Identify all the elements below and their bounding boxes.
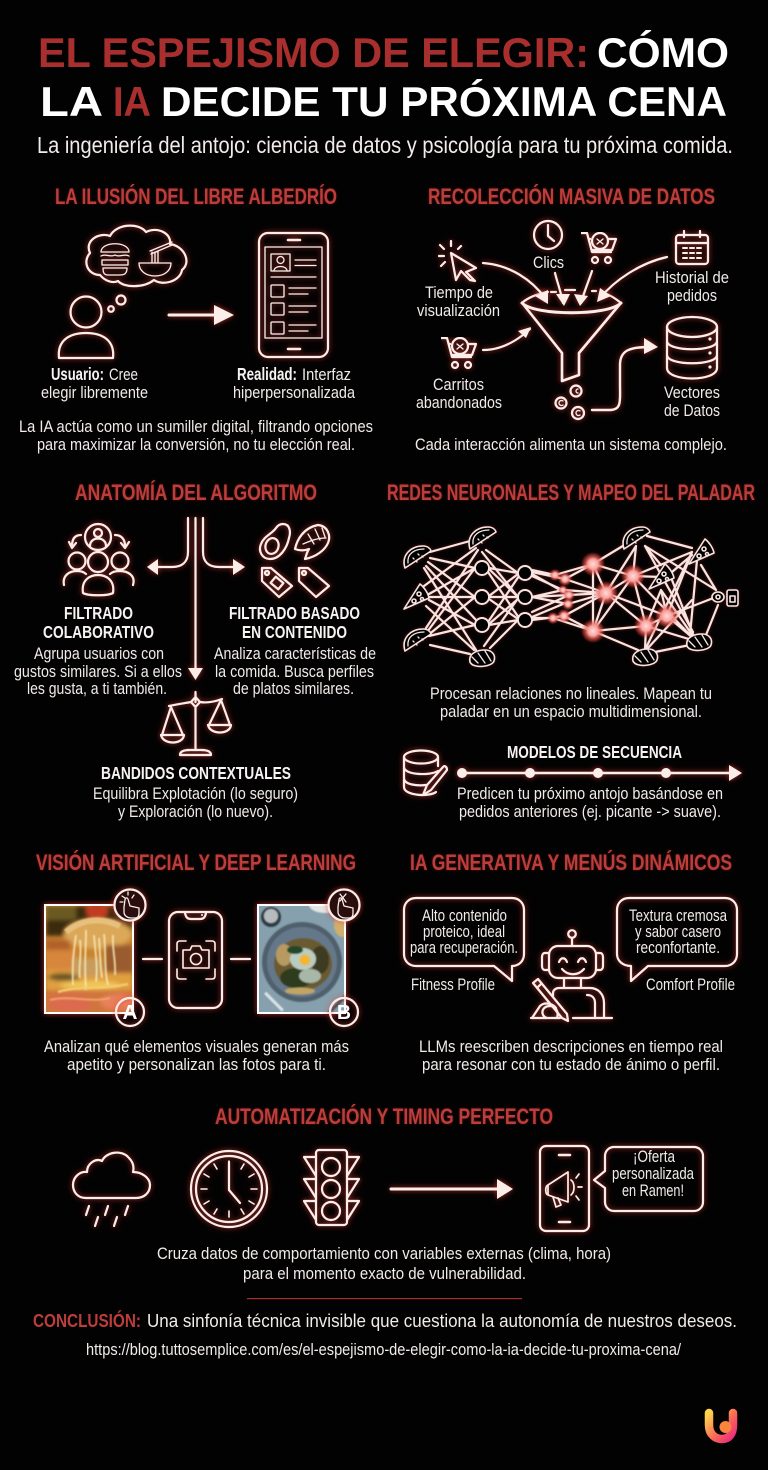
icon: robot writing [531,930,612,1021]
label: filtrado basado en contenido: EN CONTENIDO [242,622,347,642]
panel: visión artificial [36,850,360,1074]
label: realidad [233,364,356,402]
title [38,28,729,125]
data source labels: Clics [533,254,564,272]
heading: ANATOMÍA DEL ALGORITMO [75,480,317,505]
arrows into funnel [483,257,667,350]
conclusion: Una sinfonía técnica invisible que cuestiona la autonomía de nuestros deseos. [147,1311,737,1331]
label: filtrado colaborativo: FILTRADO [64,603,133,623]
badge: B [330,998,358,1026]
label: filtrado colaborativo: COLABORATIVO [43,622,154,642]
description [419,1038,723,1074]
icon: phone with megaphone [540,1146,589,1231]
description [157,1245,611,1283]
badge: touch A [114,890,146,920]
label: realidad: Realidad: [237,364,297,384]
title: IA [113,78,151,125]
description: para maximizar la conversión, no tu elección real. [37,436,355,454]
description [19,418,373,454]
speech bubble: comfort: y sabor casero [635,923,721,941]
icon: funnel [522,290,621,419]
neurons [475,561,532,632]
icon: database with pencil [404,750,447,795]
icon: user thinking of food [59,226,186,358]
icon: collaborative users [64,524,134,595]
label: filtrado basado en contenido: Analiza características de [214,645,376,663]
data source labels: visualización [417,302,500,320]
label: filtrado colaborativo [14,603,182,698]
panel: anatomía del algoritmo [14,480,376,821]
description: Predicen tu próximo antojo basándose en [457,785,723,803]
description: apetito y personalizan las fotos para ti. [67,1056,326,1074]
icon: phone with camera [169,912,222,1008]
label: fitness profile: Fitness Profile [411,976,495,994]
description: para resonar con tu estado de ánimo o perfil. [422,1056,720,1074]
description: pedidos anteriores (ej. picante -> suave). [459,803,721,821]
description: paladar en un espacio multidimensional. [440,703,702,721]
badge: B: B [337,1002,351,1024]
label: realidad: Interfaz [302,366,351,384]
label: bandidos contextuales: y Exploración (lo nuevo). [118,803,273,821]
left connections [424,541,519,654]
data source labels [416,254,729,420]
description [44,1038,349,1074]
icon: clock [191,1151,267,1227]
label: filtrado basado en contenido: FILTRADO BASADO [229,603,360,623]
description: Cada interacción alimenta un sistema complejo. [415,436,727,454]
label: usuario: elegir libremente [41,384,148,402]
title: LA [40,78,103,125]
speech bubble: fitness: para recuperación. [410,939,518,957]
title: DECIDE TU PRÓXIMA CENA [161,77,727,125]
speech bubble: fitness [404,898,524,981]
icon: calendar [676,231,708,264]
connector dashes [143,958,250,960]
description: Cruza datos de comportamiento con variables externas (clima, hora) [157,1245,611,1263]
icon: clock [534,221,562,249]
label: bandidos contextuales [93,763,298,821]
label: filtrado basado en contenido: de platos similares. [233,680,354,698]
description [457,785,723,821]
icon: cursor [439,241,476,281]
badge: A: A [122,1002,138,1024]
description: La IA actúa como un sumiller digital, filtrando opciones [19,418,373,436]
label: modelos de secuencia: MODELOS DE SECUENCIA [507,742,682,762]
speech bubble: comfort: reconfortante. [636,939,720,957]
label: usuario: Cree [109,366,138,384]
badge: touch B [328,890,360,920]
speech bubble: fitness: Alto contenido [422,907,507,925]
data source labels: Tiempo de [425,284,493,302]
panel: IA generativa [404,850,737,1074]
icon: cart top [581,233,616,263]
label: filtrado colaborativo: Agrupa usuarios con [34,645,164,663]
callout: oferta [594,1147,703,1211]
photo B: plate with egg [257,897,352,1016]
icon: phone interface [259,233,328,357]
branching arrows [147,518,245,680]
panel: automatización [73,1104,703,1283]
description: Analizan qué elementos visuales generan más [44,1038,349,1056]
heading: VISIÓN ARTIFICIAL Y DEEP LEARNING [36,850,356,875]
icon: rain cloud [73,1153,150,1226]
data source labels: abandonados [416,394,502,412]
arrow [391,1179,513,1199]
photo A: pizza with melted cheese [44,902,136,1014]
timeline [457,765,742,781]
arrow [169,305,234,325]
label: filtrado basado en contenido [214,603,376,698]
callout: oferta: ¡Oferta [633,1148,676,1166]
panel: redes neuronales [387,480,755,821]
data source labels: pedidos [667,287,717,305]
central connections [532,570,569,620]
label: bandidos contextuales: BANDIDOS CONTEXTUALES [101,763,291,783]
title: EL ESPEJISMO DE ELEGIR: [38,29,589,76]
panel: la ilusión del libre albedrío [19,184,373,454]
neural network chart [404,527,738,666]
icon: traffic light [304,1150,359,1225]
data source labels: Vectores [664,384,720,402]
callout: oferta: personalizada [612,1165,695,1183]
icon: scales [161,692,231,755]
label: usuario [41,364,148,402]
icon: cart left [441,338,476,368]
description: Procesan relaciones no lineales. Mapean tu [430,685,712,703]
source url: https://blog.tuttosemplice.com/es/el-espejismo-de-elegir-como-la-ia-decide-tu-proxima-cena/ [86,1341,681,1359]
heading: LA ILUSIÓN DEL LIBRE ALBEDRÍO [55,184,337,209]
food nodes [404,527,738,666]
label: filtrado basado en contenido: la comida. Busca perfiles [215,663,374,681]
speech bubble: comfort: Textura cremosa [629,907,728,925]
label: bandidos contextuales: Equilibra Explotación (lo seguro) [93,785,298,803]
conclusion: CONCLUSIÓN: [33,1310,141,1331]
data source labels: Historial de [655,269,729,287]
label: usuario: Usuario: [51,364,104,384]
label: filtrado colaborativo: gustos similares. Si a ellos [14,663,182,681]
logo [709,1413,733,1439]
data source labels: Carritos [433,376,484,394]
panel: recolección masiva de datos [415,184,729,454]
badge: A [116,998,144,1026]
description: LLMs reescriben descripciones en tiempo real [419,1038,723,1056]
speech bubble: fitness: proteico, ideal [423,923,505,941]
data source labels: de Datos [664,402,720,420]
label: realidad: hiperpersonalizada [233,384,356,402]
label: comfort profile: Comfort Profile [646,976,735,994]
title: CÓMO [597,28,729,76]
right connections [593,536,718,652]
description [430,685,712,721]
speech bubble: comfort [617,898,737,981]
heading: AUTOMATIZACIÓN Y TIMING PERFECTO [215,1104,553,1129]
description: para el momento exacto de vulnerabilidad. [243,1265,526,1283]
label: filtrado colaborativo: les gusta, a ti también. [27,680,167,698]
icon: food and tags [260,524,329,597]
arrow to database [592,338,658,410]
icon: database [667,317,717,378]
callout: oferta: en Ramen! [622,1182,684,1200]
